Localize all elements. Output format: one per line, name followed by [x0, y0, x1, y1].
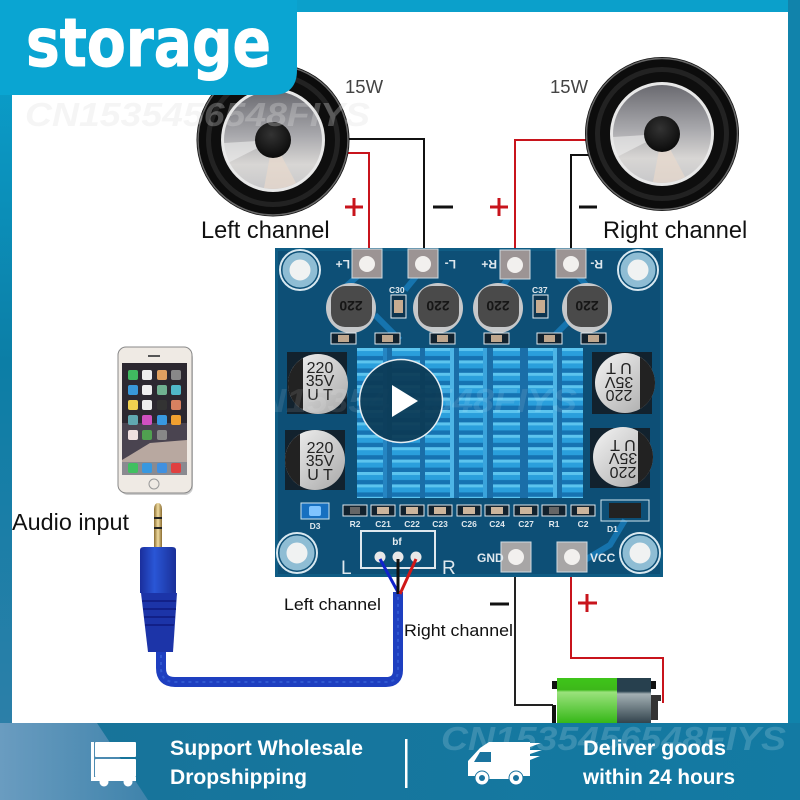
small capacitors C30 C37: [389, 285, 548, 318]
terminal labels: [336, 257, 616, 565]
heatsink: [357, 348, 583, 498]
text: support wholesale: [170, 737, 363, 789]
audio input socket: bf: [392, 537, 402, 548]
signal wires: [380, 559, 416, 594]
label: 15W left: 15W: [345, 76, 384, 97]
electrolytic capacitors: 35V: [306, 453, 335, 470]
label: left channel: Left channel: [201, 218, 330, 244]
inductors: 220: [575, 298, 599, 314]
electrolytic capacitors: 35V: [604, 373, 633, 390]
bottom component row: C24: [489, 519, 505, 529]
electrolytic capacitors: U T: [307, 467, 333, 484]
wires: power: [515, 577, 663, 705]
electrolytic capacitors: 220: [307, 360, 333, 377]
watermark: top: CN1535456548FIYS: [25, 96, 370, 133]
bottom component row: R2: [350, 519, 361, 529]
small capacitors C30 C37: C30: [389, 285, 405, 295]
terminal labels: VCC: [590, 551, 616, 565]
terminals: [352, 249, 587, 572]
bottom component row: C27: [518, 519, 534, 529]
label: right channel small: Right channel: [404, 622, 513, 640]
inductors: [326, 283, 612, 333]
panel: amplifier board: [275, 248, 663, 579]
audio input socket: L: [341, 558, 352, 579]
wires: speaker connections: [345, 139, 592, 250]
terminal labels: R-: [590, 257, 603, 271]
icon: storage cart: [91, 742, 136, 786]
label: audio input: Audio input: [12, 509, 130, 535]
bottom component row: C22: [404, 519, 420, 529]
label: right channel: Right channel: [603, 218, 747, 244]
label: left channel small: Left channel: [284, 596, 381, 614]
electrolytic capacitors: U T: [610, 436, 636, 453]
text: support wholesale: Dropshipping: [170, 766, 307, 789]
inductors: 220: [426, 298, 450, 314]
watermark: centre: CN1535456548FIYS: [232, 382, 577, 419]
icon: delivery truck: [468, 742, 542, 785]
panel: bottom bar: [0, 720, 800, 800]
electrolytic capacitors: 35V: [306, 373, 335, 390]
polarity marks: speakers: [345, 198, 597, 216]
icon: right speaker: [585, 57, 739, 211]
LED D3: D3: [310, 521, 321, 531]
electrolytic capacitors: U T: [606, 359, 632, 376]
electrolytic capacitors: [285, 352, 655, 490]
terminal labels: L-: [445, 257, 456, 271]
electrolytic capacitors: 35V: [608, 449, 637, 466]
audio input socket: R: [442, 558, 456, 579]
bottom component row: C2: [578, 519, 589, 529]
play button: [360, 360, 442, 442]
bottom component row: C21: [375, 519, 391, 529]
top component row: [331, 333, 606, 344]
bottom component row: C26: [461, 519, 477, 529]
electrolytic capacitors: 220: [606, 386, 632, 403]
inductors: 220: [486, 298, 510, 314]
LED D3: [301, 503, 329, 531]
text: deliver goods: Deliver goods: [583, 737, 726, 760]
icon: audio jack plug: [140, 503, 177, 652]
terminal labels: R+: [481, 257, 497, 271]
bottom component row: [343, 505, 595, 529]
watermark: bottom: CN1535456548FIYS: [441, 720, 786, 757]
banner title: storage: [26, 4, 271, 82]
audio input socket: [341, 531, 456, 579]
electrolytic capacitors: 220: [610, 463, 636, 480]
diode D1: D1: [607, 524, 618, 534]
text: deliver goods: [582, 737, 735, 789]
audio cable: [161, 592, 398, 682]
icon: phone: [118, 347, 193, 495]
text: deliver goods: within 24 hours: [582, 766, 735, 789]
electrolytic capacitors: 220: [307, 440, 333, 457]
divider: [405, 739, 408, 788]
terminal labels: GND: [477, 551, 504, 565]
polarity marks: power: [490, 594, 597, 612]
banner: storage tab: [0, 0, 297, 95]
mounting holes: [283, 256, 654, 567]
label: 15W right: 15W: [550, 76, 589, 97]
text: support wholesale: Support Wholesale: [170, 737, 363, 760]
diode D1: [601, 500, 649, 534]
icon: battery: [552, 678, 661, 725]
bottom component row: C23: [432, 519, 448, 529]
traces: [336, 268, 625, 560]
inductors: 220: [339, 298, 363, 314]
bottom component row: R1: [549, 519, 560, 529]
electrolytic capacitors: U T: [307, 387, 333, 404]
small capacitors C30 C37: C37: [532, 285, 548, 295]
terminal labels: L+: [336, 257, 350, 271]
icon: left speaker: [196, 64, 350, 216]
